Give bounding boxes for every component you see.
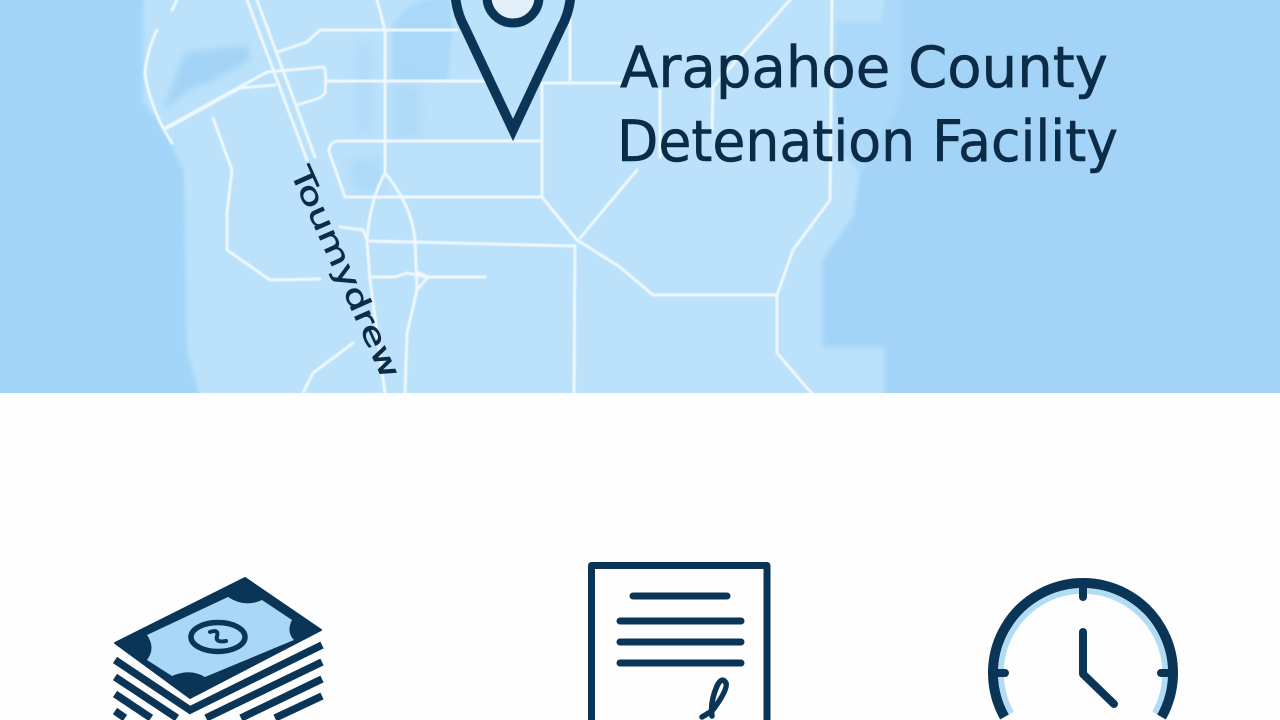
- icon: signed document: [592, 566, 767, 720]
- clock hands: [1083, 632, 1114, 704]
- northern roads: [278, 0, 620, 173]
- signature: [702, 680, 726, 717]
- coin: [191, 622, 245, 652]
- road network: [145, 0, 832, 393]
- park patch: upper left: [162, 45, 250, 112]
- text lines: [620, 596, 741, 663]
- map land base: [140, 0, 888, 393]
- central block: [329, 83, 777, 295]
- highway: [247, 0, 315, 160]
- icon: clock: [993, 583, 1173, 717]
- bill edge 4: [115, 696, 322, 718]
- panel: map: [0, 0, 1280, 420]
- park patch: central lower: [348, 43, 420, 193]
- icon: stack of money: [115, 578, 322, 718]
- pin body: [455, 0, 571, 130]
- park patch: central: [392, 0, 452, 80]
- central interchange: [340, 173, 575, 393]
- water: left: [0, 0, 206, 420]
- coin symbol: [210, 631, 226, 641]
- icon: location pin: [455, 0, 571, 130]
- top bill: [115, 578, 321, 698]
- bill edge 3: [115, 679, 322, 718]
- western roads: [145, 0, 326, 280]
- document sheet: [592, 566, 767, 720]
- title line 2: Detenation Facility: [617, 109, 1118, 175]
- southern and eastern roads: [303, 0, 832, 393]
- water: right shallow: [835, 0, 900, 172]
- bill edge 2: [115, 662, 322, 718]
- clock outer ring: [993, 583, 1173, 717]
- title line 1: Arapahoe County: [620, 35, 1108, 101]
- clock inner ring: [1001, 591, 1165, 713]
- bill edge 1: [115, 645, 322, 710]
- pin centre ring: [487, 0, 539, 23]
- water: right deep: [822, 0, 1280, 420]
- title: [617, 35, 1118, 175]
- bill face: [147, 597, 294, 677]
- lower bills: [115, 645, 322, 718]
- hour ticks: [995, 584, 1171, 673]
- road label: Toumydrew: [283, 160, 407, 383]
